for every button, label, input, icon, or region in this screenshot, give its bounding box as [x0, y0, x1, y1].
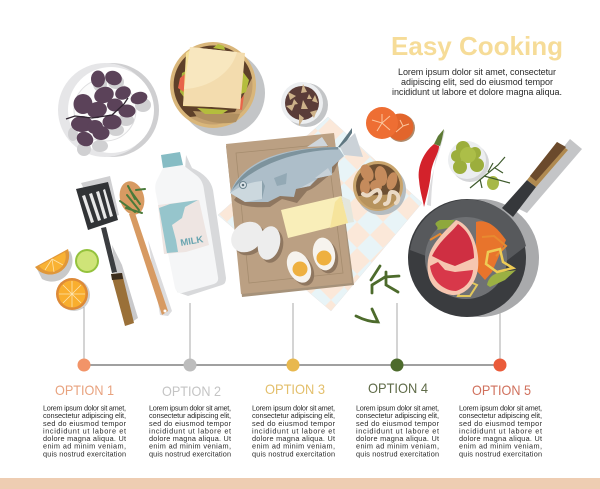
option 4: incididunt ut labore et — [356, 426, 439, 435]
option 2: sed do eiusmod tempor — [149, 419, 232, 428]
option 5: consectetur adipiscing elit, — [459, 411, 542, 420]
option 2: dolore magna aliqua. Ut — [149, 434, 231, 443]
option 1 — [43, 382, 127, 458]
icon: grapes on plate — [58, 63, 159, 157]
option 3: quis nostrud exercitation — [252, 449, 335, 458]
option 2: consectetur adipiscing elit, — [149, 411, 231, 420]
option 4: quis nostrud exercitation — [356, 449, 439, 458]
option 1: Lorem ipsum dolor sit amet, — [43, 404, 126, 412]
icon: fish — [230, 128, 363, 207]
option 3: OPTION 3 — [265, 381, 325, 397]
icon: sandwich bowl — [170, 42, 265, 136]
option 1: sed do eiusmod tempor — [43, 419, 127, 428]
option 2 — [149, 383, 232, 458]
option 4: dolore magna aliqua. Ut — [356, 434, 439, 443]
option 1: dolore magna aliqua. Ut — [43, 434, 126, 443]
option 3: enim ad minim veniam, — [252, 442, 335, 451]
option 1: quis nostrud exercitation — [43, 449, 126, 458]
option 3: sed do eiusmod tempor — [252, 419, 336, 428]
option 4: enim ad minim veniam, — [356, 442, 439, 451]
option 2: quis nostrud exercitation — [149, 449, 231, 458]
option 5: dolore magna aliqua. Ut — [459, 434, 542, 443]
icon: eggs — [225, 215, 341, 290]
icon: citrus slices — [35, 249, 99, 311]
icon: milk bottle: MILK — [180, 234, 204, 249]
panel: checkered cloth — [218, 117, 422, 311]
icon: nut bowl — [281, 82, 328, 127]
option 3: incididunt ut labore et — [252, 426, 335, 435]
title: Easy Cooking — [391, 31, 563, 61]
icon: tomato slices — [366, 107, 415, 142]
bottom band — [0, 478, 600, 489]
option 4: Lorem ipsum dolor sit amet, — [356, 404, 439, 412]
option 5: Lorem ipsum dolor sit amet, — [459, 404, 542, 412]
icon: nuts bowl — [353, 161, 406, 215]
panel: cutting board — [226, 133, 354, 297]
option 3: dolore magna aliqua. Ut — [252, 434, 335, 443]
option 3 — [252, 381, 336, 458]
icon: wooden spoon — [116, 178, 172, 316]
icon: milk bottle — [155, 152, 226, 296]
option 3: Lorem ipsum dolor sit amet, — [252, 404, 335, 412]
option 5: OPTION 5 — [472, 382, 531, 398]
option 1: OPTION 1 — [55, 382, 114, 398]
option 1: incididunt ut labore et — [43, 426, 126, 435]
option 4: sed do eiusmod tempor — [356, 419, 440, 428]
intro text: adipiscing elit, sed do eiusmod tempor — [401, 77, 553, 87]
icon: spatula — [76, 176, 138, 326]
option 4 — [356, 380, 440, 458]
icon: rosemary sprig — [356, 266, 399, 322]
icon: chili pepper — [419, 129, 445, 207]
option 5: sed do eiusmod tempor — [459, 419, 543, 428]
intro text: Lorem ipsum dolor sit amet, consectetur — [398, 67, 556, 77]
option 5: incididunt ut labore et — [459, 426, 542, 435]
icon: olives bowl — [448, 141, 510, 190]
intro text — [392, 67, 562, 97]
option 5 — [459, 382, 543, 458]
option 5: quis nostrud exercitation — [459, 449, 542, 458]
option 3: consectetur adipiscing elit, — [252, 411, 335, 420]
option 4: OPTION 4 — [368, 380, 428, 396]
option 4: consectetur adipiscing elit, — [356, 411, 439, 420]
timeline — [78, 303, 506, 372]
option 2: OPTION 2 — [162, 383, 221, 399]
option 2: incididunt ut labore et — [149, 426, 231, 435]
option 1: enim ad minim veniam, — [43, 442, 126, 451]
option 2: Lorem ipsum dolor sit amet, — [149, 404, 231, 412]
intro text: incididunt ut labore et dolore magna aliqua. — [392, 87, 562, 97]
option 5: enim ad minim veniam, — [459, 442, 542, 451]
icon: frying pan — [408, 139, 582, 317]
option 1: consectetur adipiscing elit, — [43, 411, 126, 420]
icon: cheese — [281, 196, 354, 238]
option 2: enim ad minim veniam, — [149, 442, 231, 451]
